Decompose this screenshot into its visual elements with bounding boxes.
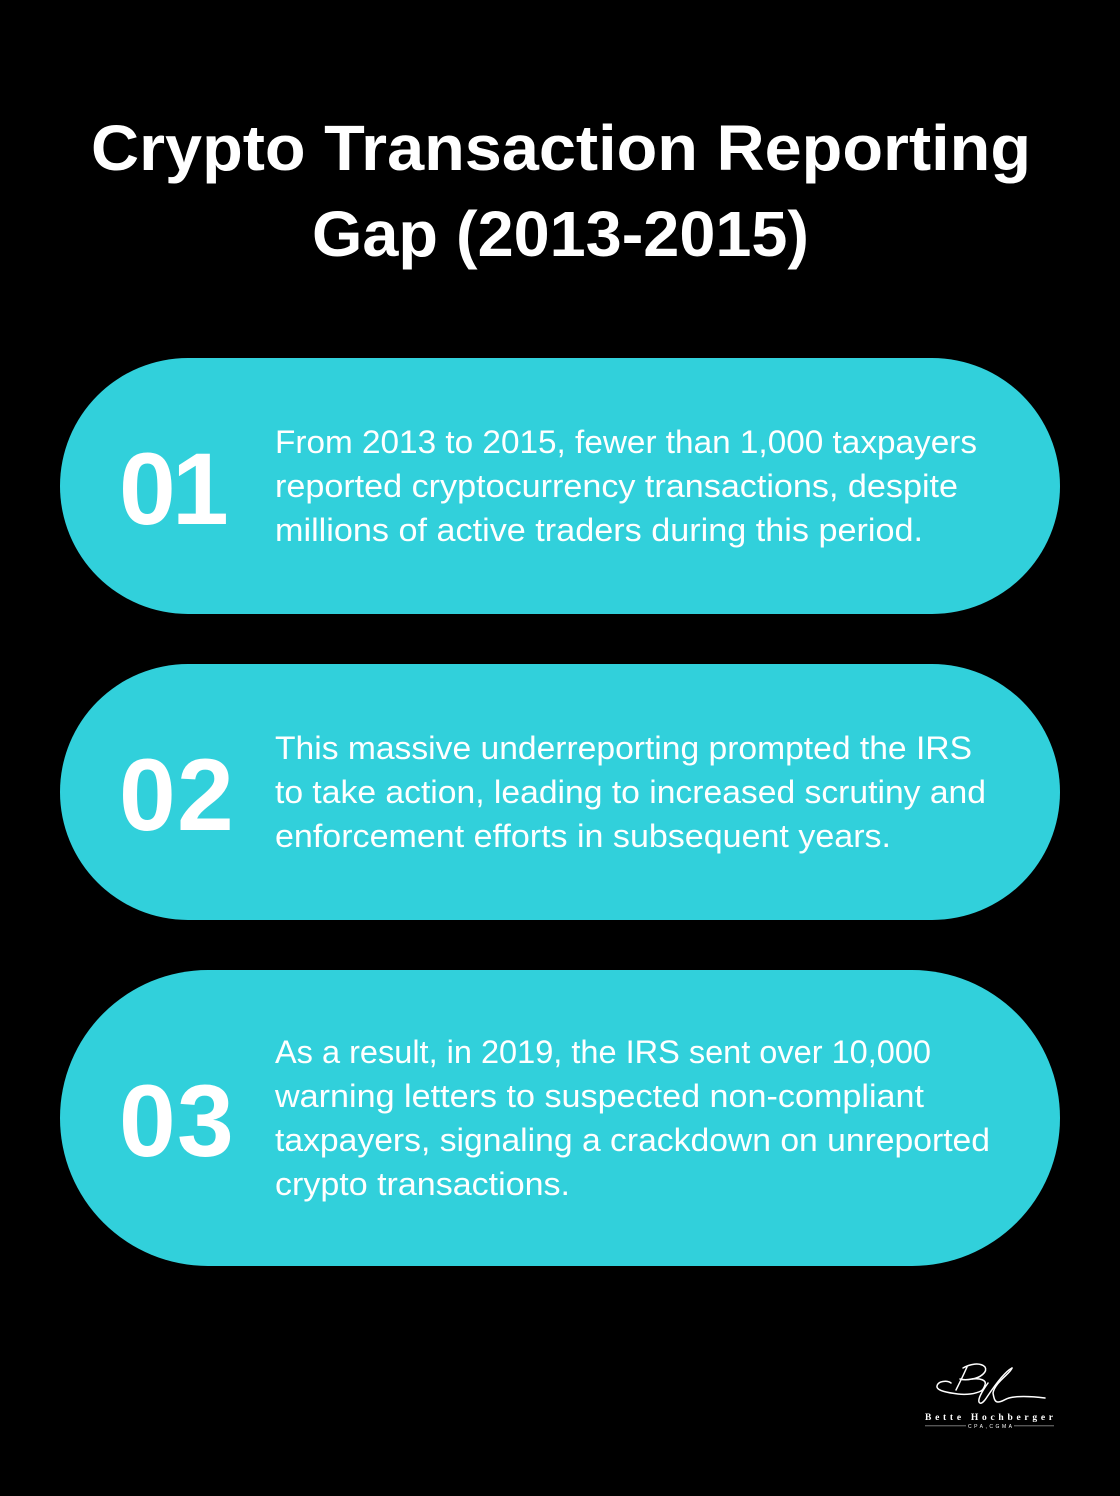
card 02 number: 02 <box>119 738 234 852</box>
card 03 background <box>60 970 1060 1266</box>
title: Gap (2013-2015) <box>312 198 809 270</box>
panel: card 03 <box>60 970 1060 1266</box>
card 03 text: crypto transactions. <box>275 1166 570 1202</box>
logo name: Bette Hochberger <box>925 1413 1054 1423</box>
card 02 text: enforcement efforts in subsequent years. <box>275 818 891 854</box>
panel: card 01 <box>60 358 1060 614</box>
card 01 text: reported cryptocurrency transactions, despite <box>275 468 958 504</box>
card 01 text: millions of active traders during this period. <box>275 512 923 548</box>
icon: BH signature monogram <box>937 1364 1045 1403</box>
card 02 text: This massive underreporting prompted the IRS <box>275 730 972 766</box>
card 03 text: warning letters to suspected non-compliant <box>274 1078 924 1114</box>
title <box>91 112 1031 270</box>
card 02 text: to take action, leading to increased scrutiny and <box>275 774 986 810</box>
card 03 number: 03 <box>119 1064 234 1178</box>
card 01 text: From 2013 to 2015, fewer than 1,000 taxpayers <box>275 424 977 460</box>
logo: Bette Hochberger signature <box>925 1364 1054 1430</box>
card 03 text: taxpayers, signaling a crackdown on unreported <box>275 1122 990 1158</box>
card 01 text <box>275 424 977 548</box>
card 02 background <box>60 664 1060 920</box>
card 03 text <box>274 1034 990 1202</box>
logo rule left <box>925 1424 966 1427</box>
logo credentials: CPA,CGMA <box>968 1424 1013 1430</box>
panel: card 02 <box>60 664 1060 920</box>
card 01 number: 01 <box>119 432 229 546</box>
title: Crypto Transaction Reporting <box>91 112 1031 184</box>
logo rule right <box>1014 1424 1054 1427</box>
card 02 text <box>275 730 986 854</box>
card 03 text: As a result, in 2019, the IRS sent over 10,000 <box>275 1034 931 1070</box>
card 01 background <box>60 358 1060 614</box>
